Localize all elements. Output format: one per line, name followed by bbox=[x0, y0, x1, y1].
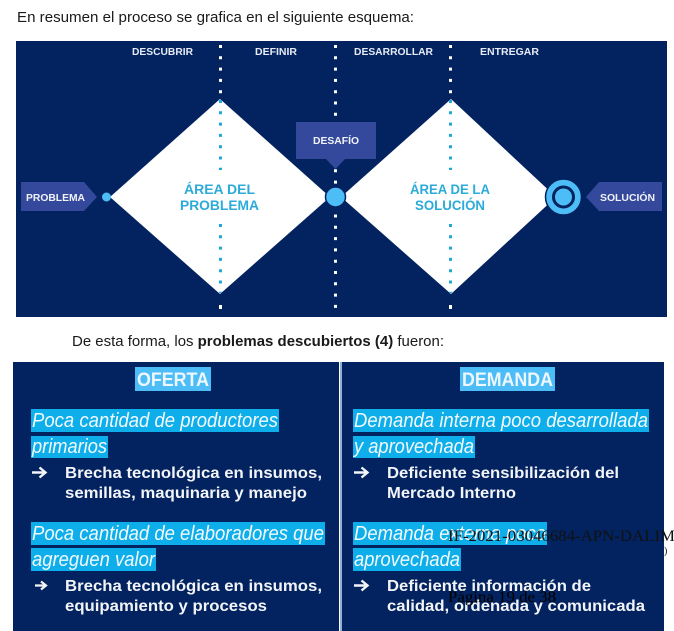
problem 3 detail: Deficiente sensibilización del bbox=[387, 465, 619, 482]
panel: demanda bbox=[342, 362, 664, 631]
problem 4 heading: Demanda externa poco bbox=[354, 523, 546, 545]
area label: solucion: ÁREA DE LA bbox=[410, 182, 490, 197]
problem 3 detail: Mercado Interno bbox=[387, 485, 516, 502]
heading: demanda: DEMANDA bbox=[462, 369, 553, 391]
problem 2 detail: equipamiento y procesos bbox=[65, 598, 267, 615]
phase labels: DESARROLLAR bbox=[354, 46, 433, 58]
area label: problema: ÁREA DEL bbox=[184, 182, 255, 197]
intro sentence: En resumen el proceso se grafica en el siguiente esquema: bbox=[17, 10, 414, 26]
problem 1 heading: primarios bbox=[31, 436, 107, 458]
dotted phase divider: desarrollar / entregar bbox=[449, 45, 452, 309]
area label: solucion bbox=[410, 182, 490, 213]
heading: oferta: OFERTA bbox=[137, 369, 209, 391]
phase labels: DESCUBRIR bbox=[132, 46, 193, 58]
phase labels: ENTREGAR bbox=[480, 46, 539, 58]
start dot bbox=[102, 192, 111, 202]
problem 2 heading: Poca cantidad de elaboradores que bbox=[32, 523, 324, 545]
problem 3 detail bbox=[354, 465, 619, 502]
second sentence: De esta forma, los problemas descubiertos (4) fueron: bbox=[72, 334, 444, 350]
problem 1 detail: Brecha tecnológica en insumos, bbox=[65, 465, 322, 482]
panel divider bbox=[340, 362, 342, 631]
panel: oferta bbox=[13, 362, 339, 631]
problem 3 heading bbox=[352, 409, 649, 458]
dotted phase divider: definir / desarrollar bbox=[334, 45, 337, 310]
problem 3 heading: Demanda interna poco desarrollada bbox=[354, 410, 648, 432]
document stamp: page number: Página 19 de 38 bbox=[448, 589, 556, 606]
area label: problema: PROBLEMA bbox=[180, 198, 259, 213]
callout: desafio: DESAFÍO bbox=[313, 134, 359, 147]
diamond: problem area bbox=[110, 99, 330, 294]
callout: desafio bbox=[296, 122, 376, 169]
area label: solucion: SOLUCIÓN bbox=[415, 198, 485, 213]
area label: problema bbox=[180, 182, 259, 213]
problem 1 detail: semillas, maquinaria y manejo bbox=[65, 485, 307, 502]
tag: solucion: SOLUCIÓN bbox=[600, 191, 655, 204]
tag: problema bbox=[21, 182, 97, 211]
phase labels: DEFINIR bbox=[255, 46, 297, 58]
problem 2 heading bbox=[31, 522, 325, 571]
problem 4 detail bbox=[354, 578, 645, 615]
problem 1 heading: Poca cantidad de productores bbox=[32, 410, 278, 432]
problem 1 detail bbox=[32, 465, 322, 502]
document stamp: identifier: IF-2021-03046684-APN-DALIM bbox=[448, 528, 674, 545]
panel: double diamond diagram bbox=[16, 41, 667, 317]
problem 4 heading: aprovechada bbox=[354, 549, 460, 571]
midpoint dot bbox=[326, 187, 346, 207]
problem 2 heading: agreguen valor bbox=[32, 549, 156, 571]
problem 4 heading bbox=[353, 522, 547, 571]
tag: solucion bbox=[586, 182, 662, 211]
phase labels bbox=[132, 46, 539, 58]
target end marker bbox=[546, 179, 582, 215]
problem 1 heading bbox=[31, 409, 279, 458]
tag: problema: PROBLEMA bbox=[26, 192, 85, 204]
problem 2 detail bbox=[35, 578, 322, 615]
problem 4 detail: calidad, ordenada y comunicada bbox=[387, 598, 645, 615]
problem 3 heading: y aprovechada bbox=[352, 436, 474, 458]
dotted phase divider: descubrir / definir bbox=[219, 45, 222, 309]
document stamp: cut-off mark: ) bbox=[664, 546, 667, 557]
problem 4 detail: Deficiente información de bbox=[387, 578, 591, 595]
problem 2 detail: Brecha tecnológica en insumos, bbox=[65, 578, 322, 595]
diamond: solution area bbox=[341, 99, 556, 294]
